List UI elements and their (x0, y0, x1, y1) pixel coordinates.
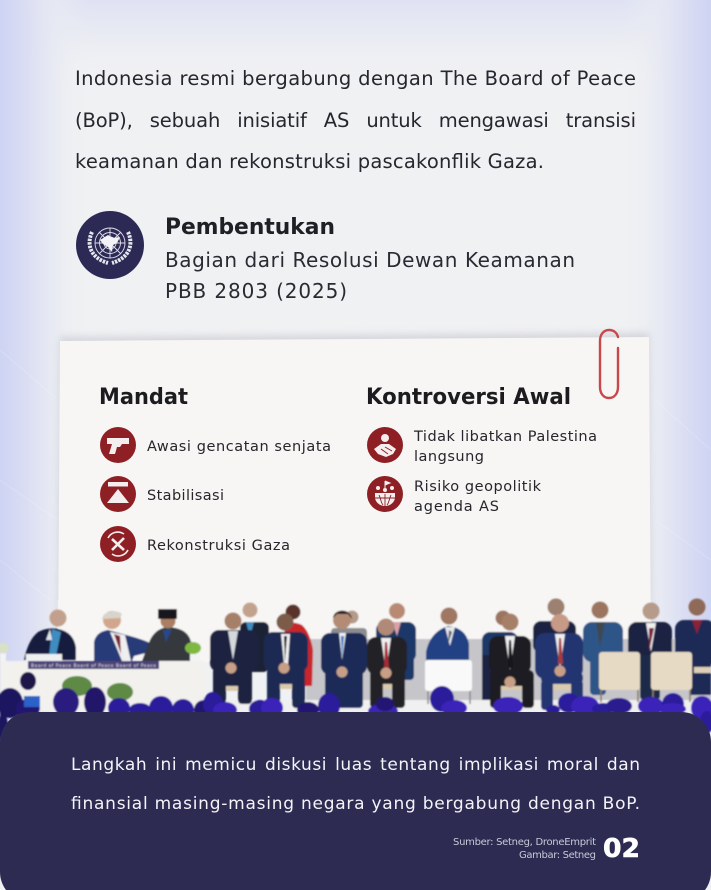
item: Rekonstruksi Gaza: Rekonstruksi Gaza (147, 538, 290, 554)
back row delegates (240, 598, 576, 700)
text: Pembentukan description: Bagian dari Resolusi Dewan Keamanan (165, 248, 575, 272)
left table with banner: Board of Peace Board of Peace Board of Peace (31, 663, 156, 669)
source credits: Gambar: Setneg (519, 850, 596, 861)
page number: 02 (603, 834, 640, 864)
audience heads (0, 672, 711, 743)
icon: UN emblem (76, 211, 144, 279)
text: Pembentukan description: PBB 2803 (2025) (165, 279, 347, 303)
closing statement: Langkah ini memicu diskusi luas tentang implikasi moral dan (71, 755, 640, 775)
intro text block: Indonesia resmi bergabung dengan The Board of Peace (75, 67, 636, 90)
item: Tidak libatkan Palestina langsung: Tidak libatkan Palestina (413, 429, 597, 445)
item: Stabilisasi: Stabilisasi (147, 488, 224, 504)
heading: Mandat: Mandat (99, 385, 188, 410)
item: Tidak libatkan Palestina langsung: langsung (414, 449, 484, 465)
item: Risiko geopolitik agenda AS: agenda AS (414, 499, 499, 515)
seat cushions (225, 683, 574, 691)
source credits: Sumber: Setneg, DroneEmprit (453, 837, 596, 848)
item: Risiko geopolitik agenda AS: Risiko geopolitik (414, 479, 542, 495)
photo: signing ceremony on stage (0, 598, 711, 743)
item: Awasi gencatan senjata: Awasi gencatan senjata (147, 439, 331, 455)
paper card shadow (58, 333, 651, 650)
panel: bottom navy (0, 712, 711, 890)
intro text block (75, 67, 636, 173)
grey backdrop (306, 639, 711, 701)
intro text block: (BoP), sebuah inisiatif AS untuk mengawasi transisi (75, 109, 636, 132)
closing statement (71, 755, 640, 814)
stage wall (58, 600, 651, 660)
item: Risiko geopolitik agenda AS (367, 476, 542, 515)
heading: Pembentukan: Pembentukan (165, 215, 335, 240)
beige chairs (599, 652, 711, 702)
intro text block: keamanan dan rekonstruksi pascakonflik Gaza. (75, 150, 544, 173)
seated delegates front row (210, 598, 711, 710)
item: Tidak libatkan Palestina langsung (367, 427, 597, 465)
closing statement: finansial masing-masing negara yang bergabung dengan BoP. (71, 794, 640, 814)
panel: paper note (58, 337, 651, 662)
source credits (453, 837, 596, 861)
item: Awasi gencatan senjata (100, 427, 331, 463)
heading: Kontroversi Awal: Kontroversi Awal (366, 385, 571, 410)
item: Rekonstruksi Gaza (100, 526, 290, 562)
stage floor (205, 700, 711, 714)
text: Pembentukan description (165, 248, 575, 303)
left table with banner (0, 609, 205, 711)
icon: red paper clip (600, 330, 618, 398)
item: Stabilisasi (100, 476, 224, 512)
